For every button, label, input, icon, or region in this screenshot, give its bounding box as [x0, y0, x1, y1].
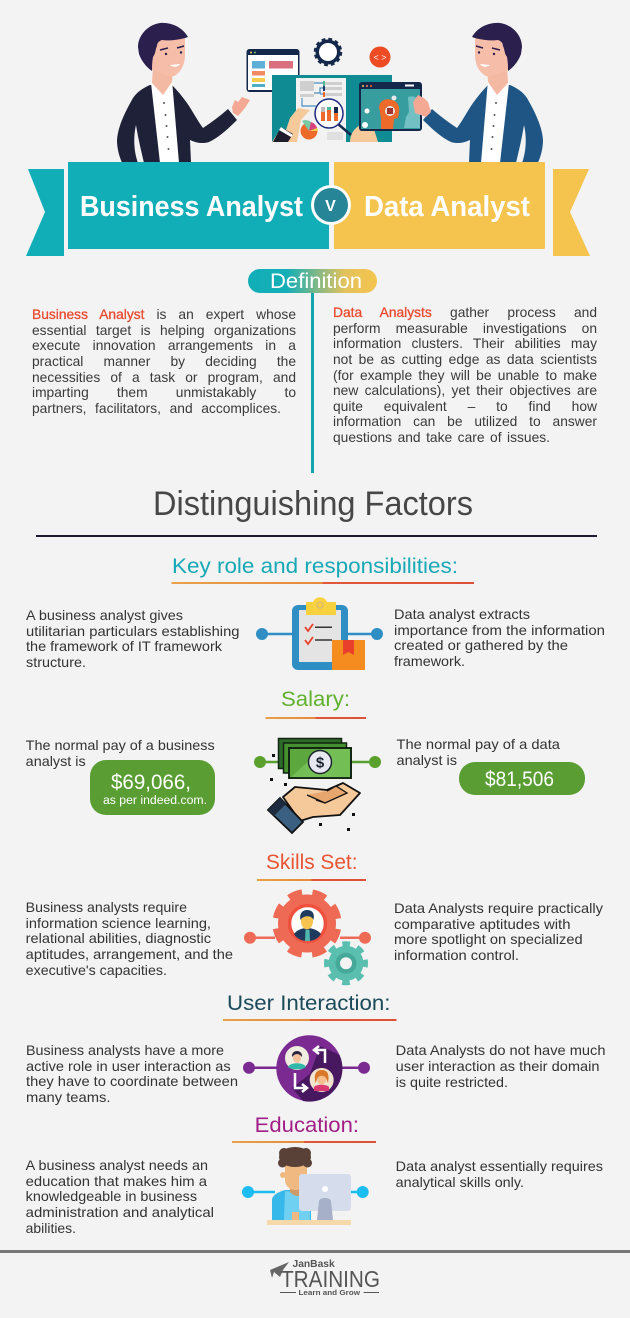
icon: user interaction	[243, 1035, 370, 1102]
footer rule	[0, 1250, 630, 1253]
text: data analyst education: analytical skills only.	[396, 1175, 524, 1190]
salary pill: business analyst: as per indeed.com.	[103, 795, 207, 807]
text: data analyst definition: (for example they will be unable to make	[333, 368, 597, 383]
text: business analyst education: administration and analytical	[26, 1205, 214, 1220]
icon: code badge	[370, 46, 390, 68]
text: data analyst skills: comparative aptitudes with	[394, 917, 570, 932]
text: business analyst education	[26, 1158, 214, 1236]
text: data analyst skills: Data Analysts require practically	[394, 901, 603, 916]
text: data analyst pay: The normal pay of a data	[396, 737, 560, 752]
text: business analyst interaction: many teams.	[26, 1090, 110, 1105]
heading: skills set: Skills Set:	[266, 851, 358, 874]
text: data analyst definition: new calculations), yet their objectives are	[333, 383, 597, 398]
definition pill: Definition	[270, 270, 362, 293]
text: business analyst skills	[26, 900, 233, 978]
text: business analyst definition: essential target is helping organizations	[32, 323, 296, 338]
icon: tablet	[359, 82, 422, 131]
center divider line	[311, 293, 314, 473]
text: business analyst skills: aptitudes, arrangement, and the	[26, 947, 233, 962]
versus badge	[311, 185, 351, 225]
salary pill: business analyst	[90, 760, 215, 815]
icon: gears with person	[244, 883, 371, 983]
text: data analyst skills: more spotlight on specialized	[394, 932, 583, 947]
text: business analyst definition: imparting them unmistakably to	[32, 385, 296, 400]
salary pill: data analyst	[459, 762, 585, 795]
text: data analyst definition: not be as cutting edge as data scientists	[333, 352, 597, 367]
banner: data analyst: Data Analyst	[364, 191, 530, 223]
text: business analyst pay	[26, 738, 215, 769]
icon: navy gear	[315, 39, 341, 65]
text: business analyst interaction	[26, 1043, 238, 1105]
icon: magnifier over bar chart	[315, 99, 351, 135]
title: distinguishing factors: Distinguishing Factors	[153, 485, 473, 523]
text: data analyst pay: analyst is	[396, 753, 457, 768]
teal data panel	[272, 75, 392, 142]
text: data analyst interaction	[396, 1043, 606, 1090]
text: data analyst interaction: is quite restricted.	[396, 1075, 508, 1090]
text: data analyst definition: information clusters. Their abilities may	[333, 336, 597, 351]
text: data analyst role: Data analyst extracts	[394, 607, 530, 622]
icon: code badge: < >	[373, 52, 387, 62]
text: business analyst interaction: they have to coordinate between	[26, 1074, 238, 1089]
text: data analyst interaction: user interaction as their domain	[396, 1059, 600, 1074]
text: business analyst role: A business analyst gives	[26, 608, 183, 623]
text: data analyst definition: quite equivalent – to find how	[333, 399, 597, 414]
text: business analyst education: A business analyst needs an	[26, 1158, 208, 1173]
text: data analyst pay	[396, 737, 560, 768]
logo: janbask training: TRAINING	[281, 1266, 380, 1292]
text: business analyst interaction: active role in user interaction as	[26, 1059, 231, 1074]
person: business analyst	[117, 23, 250, 163]
text: business analyst skills: relational abilities, diagnostic	[26, 931, 211, 946]
banner: business analyst: Business Analyst	[80, 191, 303, 223]
heading: education: Education:	[255, 1114, 359, 1137]
text: data analyst definition: information can be utilized to answer	[333, 414, 597, 429]
text: business analyst pay: analyst is	[26, 754, 86, 769]
logo: janbask training	[270, 1258, 380, 1297]
definition pill	[248, 269, 377, 293]
text: data analyst role: importance from the information	[394, 623, 605, 638]
text: data analyst education	[396, 1159, 603, 1190]
text: business analyst skills: information science learning,	[26, 916, 211, 931]
text: business analyst role	[26, 608, 240, 670]
text: business analyst definition: partners, facilitators, and accomplices.	[32, 401, 281, 416]
text: data analyst definition: perform measurable investigations on	[333, 321, 597, 336]
heading: user interaction: User Interaction:	[227, 992, 390, 1015]
text: data analyst skills: information control.	[394, 948, 519, 963]
heading: salary	[266, 688, 366, 719]
banner: data analyst	[334, 162, 545, 249]
text: business analyst definition: practical manner by deciding the	[32, 354, 296, 369]
text: business analyst definition: necessities of a task or program, and	[32, 370, 296, 385]
text: business analyst role: structure.	[26, 655, 86, 670]
text: business analyst definition: execute innovation arrangements in a	[32, 338, 296, 353]
text: data analyst definition: Data Analysts gather process and	[333, 305, 597, 320]
text: data analyst interaction: Data Analysts do not have much	[396, 1043, 606, 1058]
icon: clipboard	[256, 597, 383, 670]
text: data analyst skills	[394, 901, 603, 963]
logo: janbask training: Learn and Grow	[298, 1288, 360, 1297]
text: business analyst education: education that makes him a	[26, 1174, 207, 1189]
icon: browser window	[246, 49, 300, 92]
salary pill: data analyst: $81,506	[485, 768, 554, 791]
text: data analyst definition	[333, 305, 597, 445]
text: business analyst education: knowledgeable in business	[26, 1189, 197, 1204]
logo: janbask training: JanBask	[292, 1258, 335, 1270]
text: data analyst role: framework.	[394, 654, 465, 669]
text: business analyst skills: Business analysts require	[26, 900, 187, 915]
icon: money in hand	[254, 738, 381, 833]
text: data analyst education: Data analyst essentially requires	[396, 1159, 603, 1174]
text: business analyst pay: The normal pay of a business	[26, 738, 215, 753]
central analytics illustration	[246, 39, 431, 142]
icon: money in hand: $	[316, 754, 325, 772]
banner: left tail	[26, 169, 64, 256]
text: data analyst role: created or gathered by the	[394, 638, 568, 653]
text: business analyst education: abilities.	[26, 1221, 76, 1236]
icon: pie chart	[300, 120, 318, 140]
banner: right tail	[553, 169, 590, 256]
text: data analyst definition: questions and take care of issues.	[333, 430, 550, 445]
hand on tablet	[413, 95, 431, 117]
text: business analyst skills: executive's capacities.	[26, 963, 167, 978]
text: business analyst role: the framework of IT framework	[26, 639, 222, 654]
versus badge: V	[325, 198, 336, 215]
icon: student at computer	[242, 1147, 369, 1225]
heading: salary: Salary:	[281, 688, 350, 711]
text: business analyst definition: Business Analyst is an expert whose	[32, 307, 296, 322]
text: data analyst role	[394, 607, 605, 669]
text: business analyst interaction: Business analysts have a more	[26, 1043, 224, 1058]
heading: key role: Key role and responsibilities:	[172, 555, 458, 578]
banner: business analyst	[68, 162, 329, 249]
heading: skills set	[257, 851, 366, 881]
salary pill: business analyst: $69,066,	[111, 771, 191, 794]
text: business analyst definition	[32, 307, 296, 416]
text: business analyst role: utilitarian particulars establishing	[26, 624, 240, 639]
person: data analyst	[423, 23, 543, 163]
